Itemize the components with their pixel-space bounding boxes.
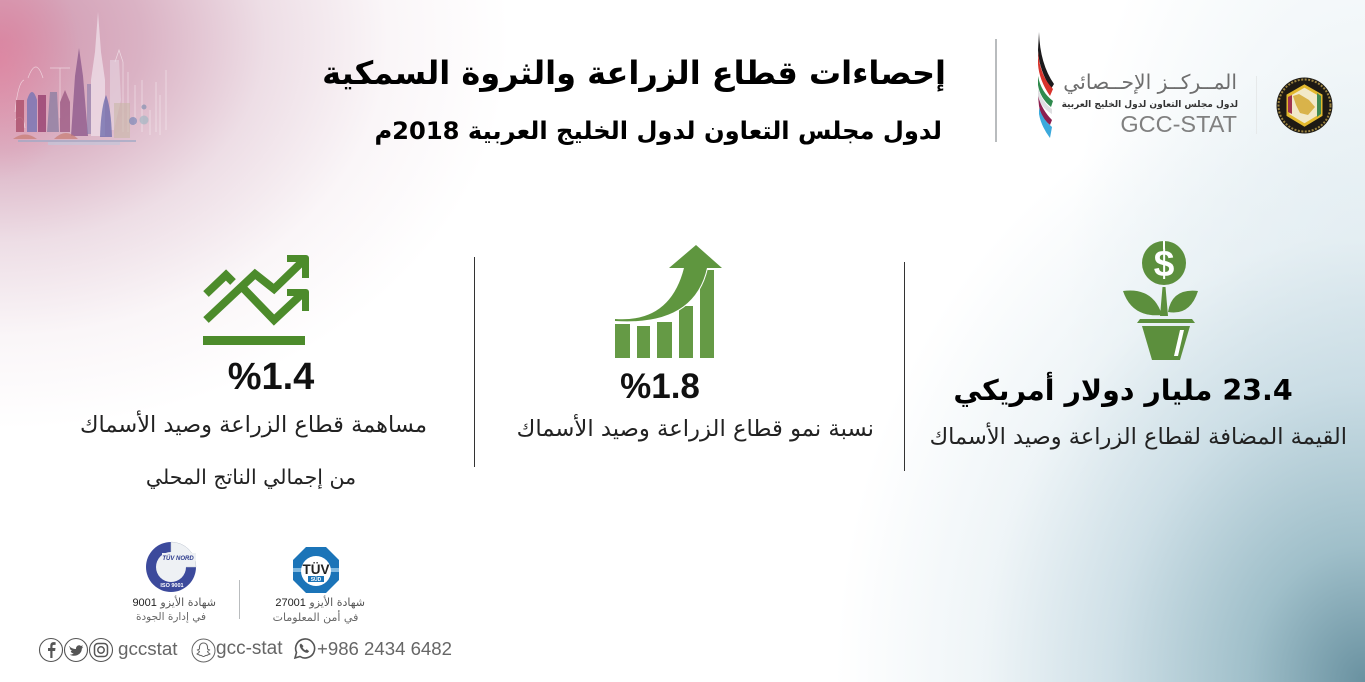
label: of GDP: من إجمالي الناتج المحلي bbox=[146, 465, 356, 489]
curved arrow bbox=[615, 245, 722, 321]
label: value added: القيمة المضافة لقطاع الزراعة وصيد الأسماك bbox=[930, 424, 1347, 450]
certificate: ISO 9001: شهادة الأيزو 9001 bbox=[132, 596, 216, 609]
label: GDP contribution: مساهمة قطاع الزراعة وصيد الأسماك bbox=[80, 412, 427, 438]
divider 2 bbox=[474, 257, 475, 467]
icon: trend lines bbox=[203, 255, 309, 345]
stat: 23.4 billion US dollars: 23.4 مليار دولار أمريكي bbox=[953, 374, 1293, 407]
icon: TUV Sud badge bbox=[293, 547, 339, 593]
icon: money plant: $ bbox=[1154, 243, 1175, 284]
icon: TUV Sud badge: SÜD bbox=[311, 576, 322, 583]
icon: money plant bbox=[1123, 241, 1198, 360]
logo divider bbox=[1256, 76, 1257, 134]
icon: TUV Sud badge: TÜV bbox=[302, 562, 330, 577]
illustration: gulf city skyline bbox=[13, 14, 166, 145]
social handle: gcc-stat: gcc-stat bbox=[216, 638, 283, 659]
icon: TUV Nord badge: ISO 9001 bbox=[160, 583, 184, 589]
logo text: Arabic name: المــركــز الإحــصائي bbox=[1063, 70, 1237, 94]
icon: whatsapp bbox=[294, 638, 316, 660]
label: growth rate: نسبة نمو قطاع الزراعة وصيد الأسماك bbox=[517, 416, 874, 442]
logo text: GCC-STAT: GCC-STAT bbox=[1120, 111, 1237, 137]
title: إحصاءات قطاع الزراعة والثروة السمكية bbox=[322, 54, 946, 92]
header divider bbox=[995, 39, 997, 142]
subtitle: لدول مجلس التعاون لدول الخليج العربية 2018م bbox=[374, 117, 942, 145]
certificate: ISO 27001: شهادة الأيزو 27001 bbox=[275, 596, 365, 609]
divider 1 bbox=[904, 262, 905, 471]
icon: GCC emblem bbox=[1276, 78, 1332, 134]
certificate divider bbox=[239, 580, 240, 619]
certificate: quality management: في إدارة الجودة bbox=[136, 611, 206, 623]
icon: snapchat bbox=[192, 638, 216, 662]
icon: TUV Nord badge: TÜV NORD bbox=[162, 555, 194, 562]
icon: GCC-STAT ribbon logo bbox=[1038, 32, 1054, 138]
stat: 1.8%: %1.8 bbox=[620, 367, 700, 406]
icon: growth bars with arrow bbox=[615, 245, 722, 358]
certificate: information security: في أمن المعلومات bbox=[273, 611, 358, 624]
stat: 1.4%: %1.4 bbox=[228, 356, 314, 398]
icon: TUV Nord badge bbox=[146, 542, 196, 592]
social handle: gccstat: gccstat bbox=[118, 638, 178, 659]
social icons: facebook, twitter, instagram bbox=[38, 638, 113, 662]
phone number: +986 2434 6482 bbox=[317, 638, 452, 659]
logo text: Arabic subtitle: لدول مجلس التعاون لدول الخليج العربية bbox=[1062, 100, 1238, 110]
